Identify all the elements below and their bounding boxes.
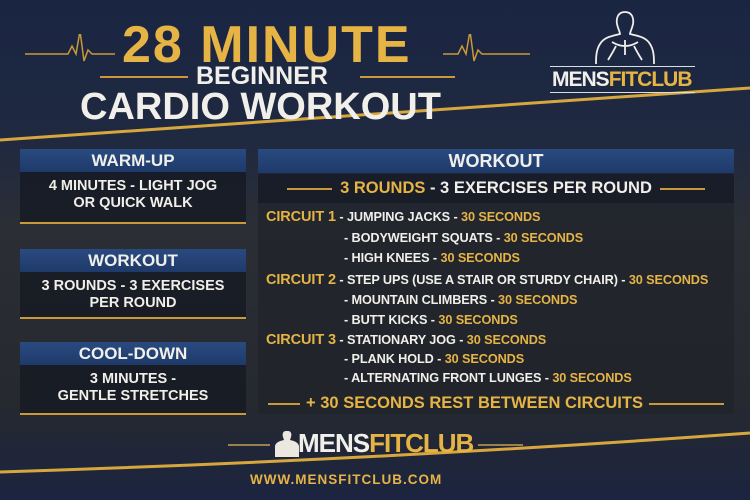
panel: workout summary: PER ROUND (89, 295, 176, 311)
panel: cool-down: 3 MINUTES - (90, 371, 176, 387)
panel: warm-up (20, 149, 246, 224)
panel: cool-down (20, 342, 246, 415)
panel: warm-up: 4 MINUTES - LIGHT JOG (49, 178, 217, 194)
circuit 2: CIRCUIT 2 - STEP UPS (USE A STAIR OR STURDY CHAIR) - 30 SECONDS (266, 272, 708, 288)
panel: cool-down: COOL-DOWN (79, 344, 187, 363)
logo bottom (228, 428, 523, 458)
title: 28 MINUTE (122, 16, 412, 74)
website url: WWW.MENSFITCLUB.COM (250, 472, 442, 487)
logo top: MENSFITCLUB (552, 68, 692, 91)
icon: heartbeat right (443, 34, 530, 62)
panel: workout details: - PLANK HOLD - 30 SECONDS (344, 352, 524, 366)
panel: warm-up: WARM-UP (91, 151, 175, 170)
panel: workout details: - BUTT KICKS - 30 SECONDS (344, 313, 518, 327)
circuit 3: CIRCUIT 3 - STATIONARY JOG - 30 SECONDS (266, 332, 546, 348)
panel: workout details (258, 149, 734, 414)
icon: heartbeat left (25, 34, 115, 62)
panel: workout summary: 3 ROUNDS - 3 EXERCISES (42, 278, 224, 294)
rounds subheading: 3 ROUNDS - 3 EXERCISES PER ROUND (340, 179, 652, 197)
panel: workout details: - HIGH KNEES - 30 SECONDS (344, 251, 520, 265)
logo top (550, 11, 695, 93)
rounds subheading (258, 174, 734, 203)
logo bottom: MENSFITCLUB (298, 428, 473, 458)
panel: workout details: - MOUNTAIN CLIMBERS - 30 SECONDS (344, 293, 577, 307)
panel: warm-up: OR QUICK WALK (73, 195, 193, 211)
rest note: + 30 SECONDS REST BETWEEN CIRCUITS (306, 394, 643, 412)
circuit 1: CIRCUIT 1 - JUMPING JACKS - 30 SECONDS (266, 209, 540, 225)
panel: workout summary (20, 249, 246, 319)
panel: cool-down: GENTLE STRETCHES (58, 388, 208, 404)
panel: workout details: - ALTERNATING FRONT LUNGES - 30 SECONDS (344, 371, 632, 385)
title: CARDIO WORKOUT (80, 86, 441, 128)
panel: workout details: WORKOUT (448, 151, 543, 171)
panel: workout details: - BODYWEIGHT SQUATS - 30 SECONDS (344, 231, 583, 245)
title: BEGINNER (196, 62, 328, 90)
title (25, 16, 530, 128)
panel: workout summary: WORKOUT (88, 251, 178, 270)
